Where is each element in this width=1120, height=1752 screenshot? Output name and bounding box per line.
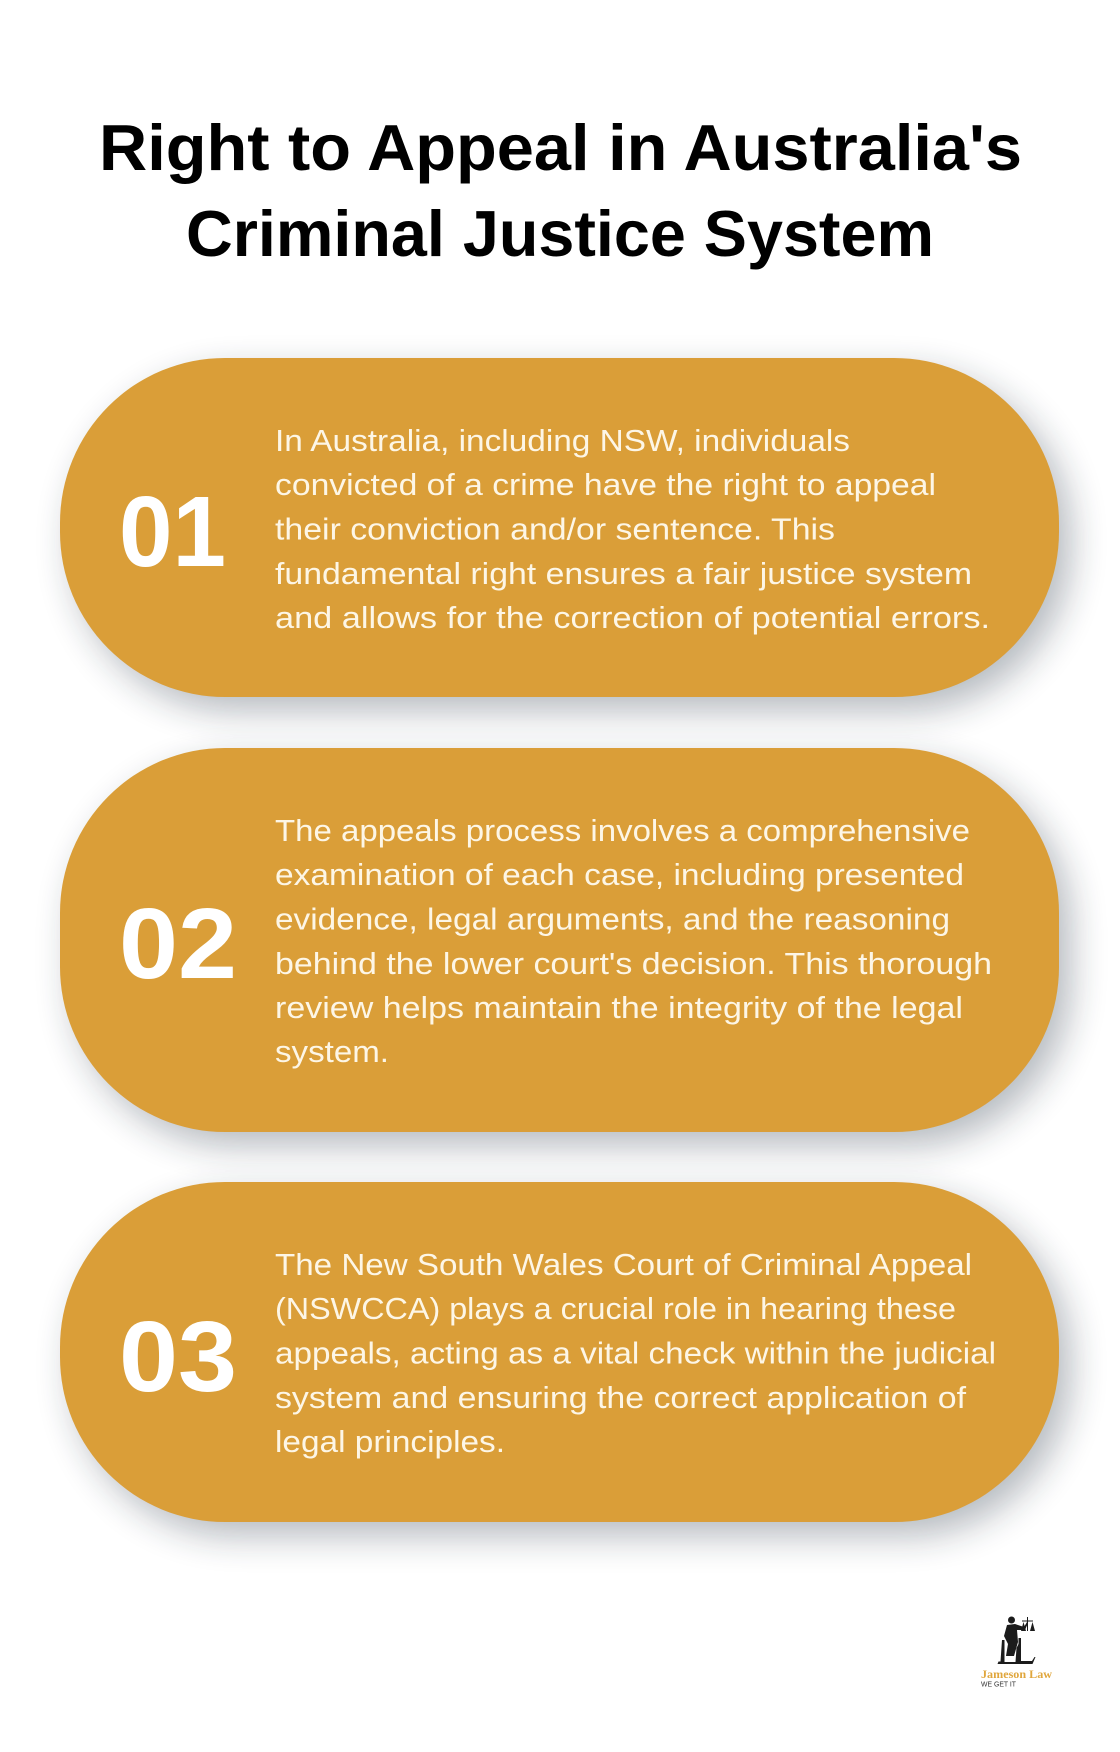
text: step 03 description	[275, 1247, 996, 1459]
text: step 03 description: (NSWCCA) plays a crucial role in hearing these	[275, 1291, 956, 1326]
title	[99, 111, 1022, 270]
icon: lady justice with scales	[998, 1616, 1036, 1664]
text: step 02 description	[275, 813, 992, 1069]
text: step 01 description: and allows for the correction of potential errors.	[275, 600, 990, 635]
title: Criminal Justice System	[186, 197, 934, 270]
text: step 02 description: evidence, legal arguments, and the reasoning	[275, 902, 950, 936]
text: step 01 description: their conviction and/or sentence. This	[275, 512, 835, 546]
brand name: Jameson Law	[981, 1669, 1053, 1681]
text: step 03 description: legal principles.	[275, 1424, 505, 1459]
text: step 01 description: convicted of a crime have the right to appeal	[275, 467, 936, 502]
text: step 02 description: behind the lower court's decision. This thorough	[275, 946, 992, 981]
tagline: WE GET IT	[981, 1680, 1016, 1688]
panel: step 02	[60, 748, 1071, 1146]
text: step 01 description: In Australia, including NSW, individuals	[275, 423, 850, 458]
text: step 03 description: system and ensuring the correct application of	[275, 1380, 966, 1415]
logo: Jameson Law	[981, 1616, 1053, 1688]
number 03: 03	[119, 1301, 237, 1413]
text: step 01 description: fundamental right ensures a fair justice system	[275, 556, 972, 591]
text: step 02 description: examination of each case, including presented	[275, 857, 964, 892]
text: step 01 description	[275, 423, 990, 635]
panel: step 03	[60, 1182, 1071, 1536]
text: step 02 description: review helps maintain the integrity of the legal	[275, 990, 963, 1025]
text: step 02 description: The appeals process involves a comprehensive	[275, 813, 970, 848]
text: step 02 description: system.	[275, 1034, 389, 1069]
text: step 03 description: The New South Wales Court of Criminal Appeal	[275, 1247, 972, 1282]
panel: step 01	[60, 358, 1071, 711]
text: step 03 description: appeals, acting as a vital check within the judicial	[275, 1336, 996, 1370]
number 01: 01	[119, 476, 226, 588]
title: Right to Appeal in Australia's	[99, 111, 1022, 184]
number 02: 02	[119, 888, 237, 1000]
